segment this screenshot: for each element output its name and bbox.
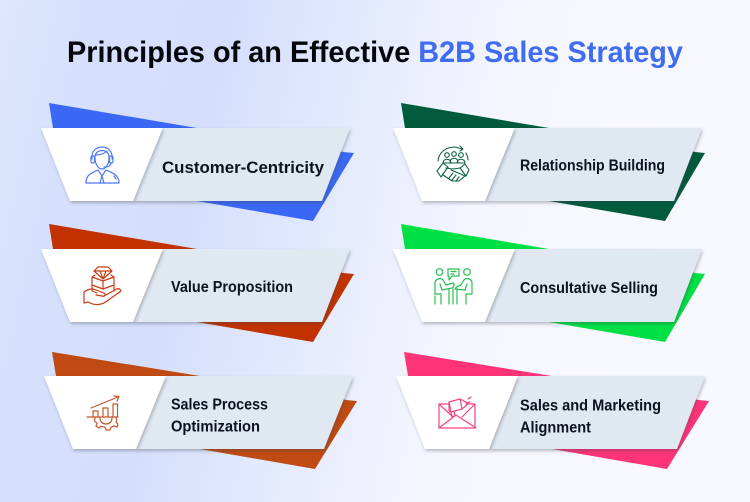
- back shape: blue: [49, 103, 354, 221]
- label band: [485, 128, 702, 201]
- icon: diamond on box in hand: [84, 267, 121, 305]
- title: Principles of an Effective B2B Sales Strategy: [67, 36, 683, 69]
- icon plate: [393, 249, 515, 322]
- label band: [489, 376, 705, 449]
- label: Sales and Marketing: [520, 398, 661, 414]
- panel: Sales and Marketing Alignment: Alignment: [520, 420, 591, 436]
- panel: Consultative Selling: [393, 224, 705, 342]
- label: Value Proposition: [171, 279, 293, 296]
- panel: Sales Process Optimization: Optimization: [171, 418, 260, 436]
- panel: Value Proposition: [41, 224, 354, 342]
- label band: [485, 249, 702, 322]
- label: Customer-Centricity: [162, 158, 325, 177]
- panel: Customer-Centricity: [41, 103, 354, 221]
- icon: rising bar chart over gear: [87, 396, 119, 430]
- icon: support agent with headset: [86, 147, 119, 183]
- icon: team and handshake: [437, 146, 469, 181]
- label band: [133, 128, 350, 201]
- back shape: dark green: [401, 103, 705, 221]
- panel: Relationship Building: [393, 103, 705, 221]
- icon: envelope with megaphone: [439, 397, 476, 428]
- label: Sales Process: [171, 396, 268, 414]
- label band: [136, 376, 353, 449]
- back shape: red-orange: [49, 224, 354, 342]
- label band: [133, 249, 350, 322]
- icon plate: [41, 128, 163, 201]
- back shape: pink: [404, 352, 709, 469]
- panel: Sales and Marketing Alignment: [396, 352, 709, 469]
- icon plate: [44, 376, 166, 449]
- icon plate: [396, 376, 518, 449]
- label: Consultative Selling: [520, 280, 658, 297]
- back shape: burnt orange: [52, 352, 357, 469]
- icon: two people talking at a table: [435, 269, 472, 304]
- label: Relationship Building: [520, 158, 665, 174]
- panel: Sales Process Optimization: [44, 352, 357, 469]
- back shape: bright green: [401, 224, 705, 342]
- icon plate: [41, 249, 163, 322]
- icon plate: [393, 128, 515, 201]
